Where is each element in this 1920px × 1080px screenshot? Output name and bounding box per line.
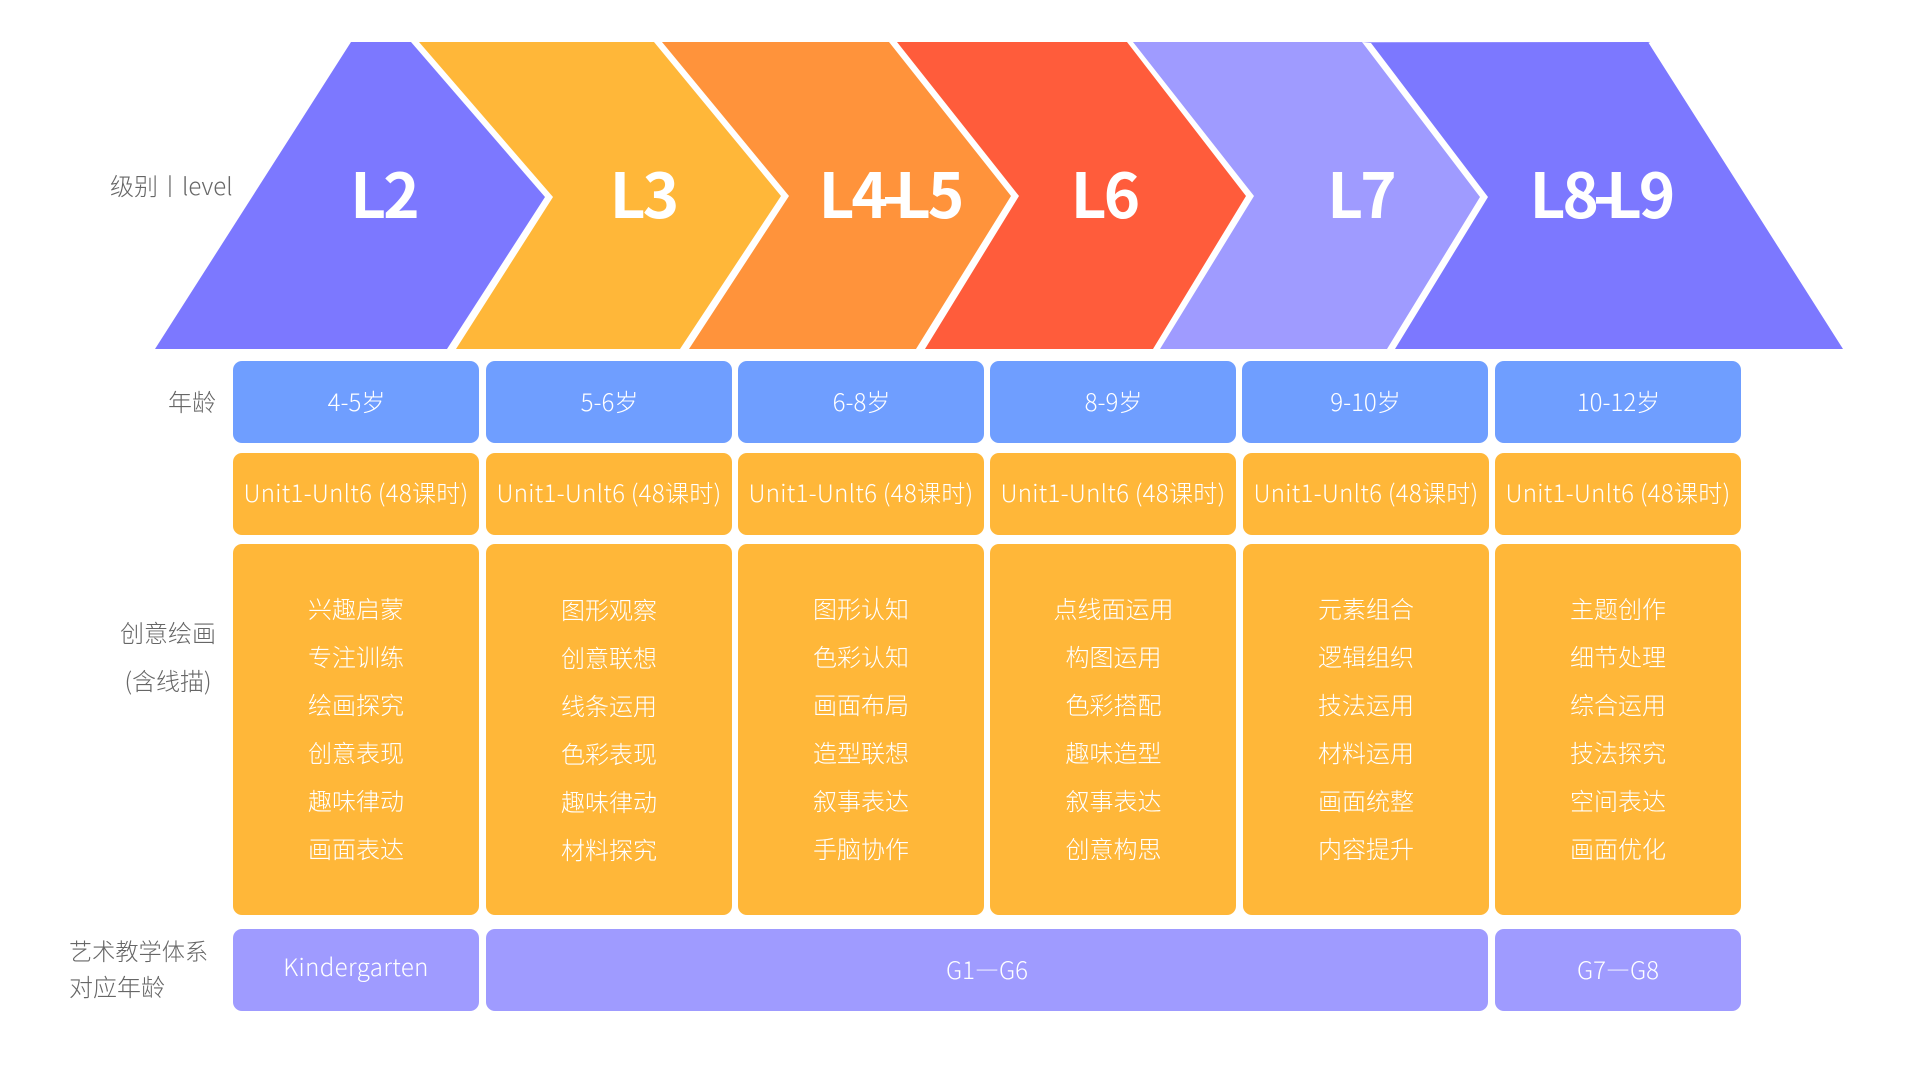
row label: creative drawing bbox=[120, 614, 216, 697]
skills: L6: 色彩搭配 bbox=[1066, 686, 1162, 721]
skills: L7 bbox=[1243, 544, 1489, 915]
chevron: L3 bbox=[419, 42, 781, 349]
skills: L4-L5: 图形认知 bbox=[813, 590, 909, 625]
age: 9-10 bbox=[1242, 361, 1488, 443]
skills: L3: 创意联想 bbox=[561, 639, 657, 674]
skills: L8-L9: 技法探究 bbox=[1570, 734, 1666, 769]
skills: L7: 材料运用 bbox=[1318, 734, 1414, 769]
creative drawing row bbox=[233, 544, 1741, 915]
unit: column 1: Unit1-Unlt6 (48课时) bbox=[244, 474, 468, 509]
unit: column 3: Unit1-Unlt6 (48课时) bbox=[749, 474, 973, 509]
age: 8-9 bbox=[990, 361, 1236, 443]
skills: L4-L5: 色彩认知 bbox=[813, 638, 909, 673]
chevron: L8-L9 bbox=[1362, 42, 1843, 349]
row label: art teaching system age bbox=[69, 933, 208, 1003]
row label: age: 年龄 bbox=[168, 383, 216, 418]
skills: L6: 构图运用 bbox=[1066, 638, 1162, 673]
skills: L8-L9: 细节处理 bbox=[1570, 638, 1666, 673]
row label: art teaching system age: 对应年龄 bbox=[69, 968, 165, 1003]
grade: Kindergarten bbox=[233, 929, 479, 1011]
age: 10-12: 10-12岁 bbox=[1577, 383, 1660, 418]
skills: L3: 趣味律动 bbox=[561, 783, 657, 818]
grade: G7—G8: G7—G8 bbox=[1577, 951, 1659, 986]
unit: column 1 bbox=[233, 453, 479, 535]
skills: L4-L5: 造型联想 bbox=[813, 734, 909, 769]
skills: L8-L9: 主题创作 bbox=[1570, 590, 1666, 625]
age: 9-10: 9-10岁 bbox=[1330, 383, 1401, 418]
grade row bbox=[233, 929, 1741, 1011]
chevron: L2: L2 bbox=[350, 146, 417, 236]
chevron: L6: L6 bbox=[1071, 146, 1138, 236]
unit: column 2 bbox=[486, 453, 732, 535]
row label: art teaching system age: 艺术教学体系 bbox=[69, 933, 208, 967]
unit: column 2: Unit1-Unlt6 (48课时) bbox=[497, 474, 721, 509]
skills: L7: 元素组合 bbox=[1318, 590, 1414, 625]
skills: L2: 画面表达 bbox=[308, 830, 404, 865]
skills: L7: 技法运用 bbox=[1318, 686, 1414, 721]
chevron: L7: L7 bbox=[1327, 146, 1394, 236]
skills: L8-L9 bbox=[1495, 544, 1741, 915]
unit: column 6 bbox=[1495, 453, 1741, 535]
row label: level: 级别丨level bbox=[110, 167, 233, 202]
skills: L2: 趣味律动 bbox=[308, 782, 404, 817]
skills: L7: 画面统整 bbox=[1318, 782, 1414, 817]
age: 5-6 bbox=[486, 361, 732, 443]
unit: column 4: Unit1-Unlt6 (48课时) bbox=[1001, 474, 1225, 509]
skills: L2: 创意表现 bbox=[308, 734, 404, 769]
chevron: L8-L9: L8-L9 bbox=[1530, 146, 1673, 236]
skills: L6: 趣味造型 bbox=[1066, 734, 1162, 769]
skills: L2 bbox=[233, 544, 479, 915]
skills: L3 bbox=[486, 544, 732, 915]
skills: L4-L5 bbox=[738, 544, 984, 915]
skills: L6: 叙事表达 bbox=[1066, 782, 1162, 817]
skills: L2: 绘画探究 bbox=[308, 686, 404, 721]
unit: column 5: Unit1-Unlt6 (48课时) bbox=[1254, 474, 1478, 509]
skills: L6: 点线面运用 bbox=[1054, 590, 1174, 625]
skills: L8-L9: 空间表达 bbox=[1570, 782, 1666, 817]
age: 6-8: 6-8岁 bbox=[833, 383, 890, 418]
row label: creative drawing: (含线描) bbox=[124, 662, 212, 697]
age: 8-9: 8-9岁 bbox=[1085, 383, 1142, 418]
skills: L3: 线条运用 bbox=[561, 687, 657, 722]
skills: L6: 创意构思 bbox=[1066, 830, 1162, 865]
grade: G1—G6 bbox=[486, 929, 1488, 1011]
grade: G1—G6: G1—G6 bbox=[946, 951, 1028, 986]
age: 5-6: 5-6岁 bbox=[581, 383, 638, 418]
chevron: L3: L3 bbox=[610, 146, 677, 236]
unit: column 3 bbox=[738, 453, 984, 535]
chevron: L2 bbox=[155, 42, 545, 349]
skills: L8-L9: 综合运用 bbox=[1570, 686, 1666, 721]
skills: L2: 专注训练 bbox=[308, 638, 404, 673]
unit row bbox=[233, 453, 1741, 535]
chevron level banner bbox=[155, 42, 1843, 349]
age: 4-5: 4-5岁 bbox=[328, 383, 385, 418]
age: 4-5 bbox=[233, 361, 479, 443]
skills: L8-L9: 画面优化 bbox=[1570, 830, 1666, 865]
skills: L4-L5: 手脑协作 bbox=[813, 830, 909, 865]
skills: L3: 材料探究 bbox=[561, 831, 657, 866]
age row bbox=[233, 361, 1741, 443]
age: 10-12 bbox=[1495, 361, 1741, 443]
chevron: L6 bbox=[897, 42, 1246, 349]
skills: L4-L5: 画面布局 bbox=[813, 686, 909, 721]
skills: L7: 逻辑组织 bbox=[1318, 638, 1414, 673]
age: 6-8 bbox=[738, 361, 984, 443]
unit: column 5 bbox=[1243, 453, 1489, 535]
skills: L2: 兴趣启蒙 bbox=[308, 590, 404, 625]
skills: L6 bbox=[990, 544, 1236, 915]
chevron: L7 bbox=[1133, 42, 1480, 349]
skills: L3: 图形观察 bbox=[561, 591, 657, 626]
chevron: L4-L5 bbox=[662, 42, 1011, 349]
unit: column 4 bbox=[990, 453, 1236, 535]
grade: Kindergarten: Kindergarten bbox=[283, 948, 429, 983]
chevron: L4-L5: L4-L5 bbox=[819, 146, 962, 236]
grade: G7—G8 bbox=[1495, 929, 1741, 1011]
unit: column 6: Unit1-Unlt6 (48课时) bbox=[1506, 474, 1730, 509]
row label: creative drawing: 创意绘画 bbox=[120, 614, 216, 649]
skills: L3: 色彩表现 bbox=[561, 735, 657, 770]
skills: L4-L5: 叙事表达 bbox=[813, 782, 909, 817]
skills: L7: 内容提升 bbox=[1318, 830, 1414, 865]
